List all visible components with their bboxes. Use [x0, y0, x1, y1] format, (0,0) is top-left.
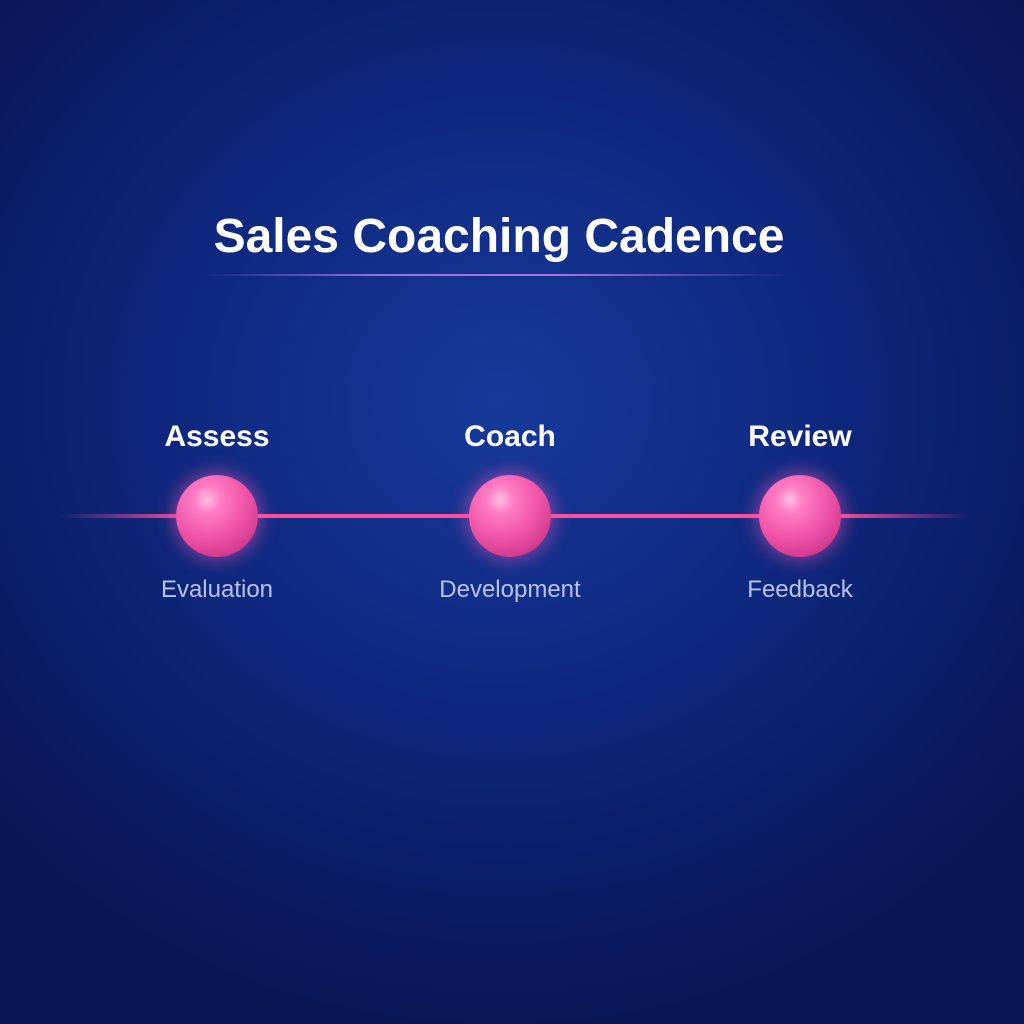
icon: sphere — [176, 475, 258, 557]
title: Sales Coaching Cadence — [214, 210, 784, 263]
step: Coach — [439, 420, 581, 603]
label: Development: Development — [439, 576, 581, 603]
label: Feedback: Feedback — [747, 576, 853, 603]
heading: Review: Review — [748, 420, 852, 453]
heading: Assess: Assess — [164, 420, 270, 453]
step: Assess — [161, 420, 273, 603]
timeline line — [60, 514, 970, 518]
icon: sphere — [469, 475, 551, 557]
heading: Coach: Coach — [464, 420, 556, 453]
icon: sphere — [759, 475, 841, 557]
step: Review — [744, 420, 856, 603]
label: Evaluation: Evaluation — [161, 576, 273, 603]
title underline — [205, 274, 790, 276]
